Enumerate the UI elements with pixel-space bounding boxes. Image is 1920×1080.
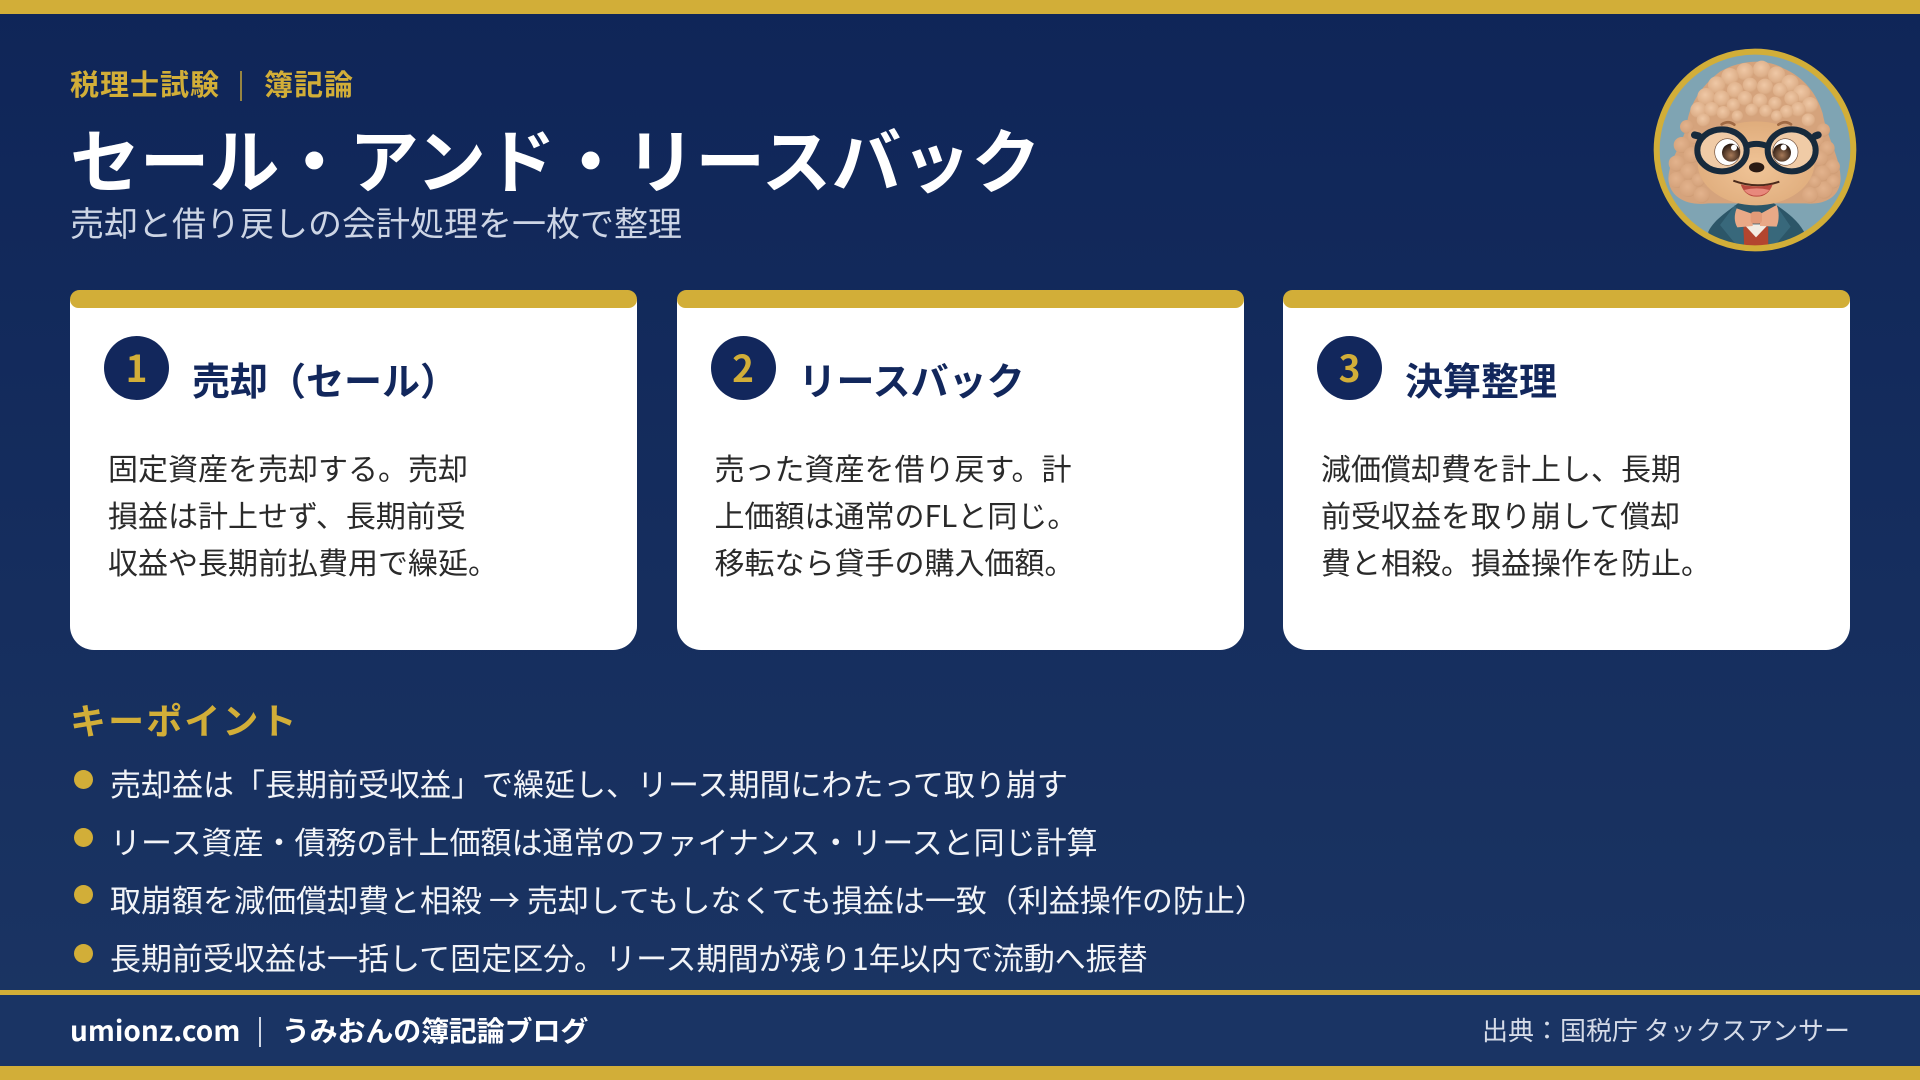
panel: key points list: [74, 760, 1266, 979]
glasses: [1695, 129, 1818, 171]
panel: key points list: 売却益は「長期前受収益」で繰延し、リース期間にわたって取り崩す: [110, 760, 1068, 805]
card body text: 収益や長期前払費用で繰延。: [108, 539, 498, 583]
footer site name: umionz.com うみおんの簿記論ブログ: [70, 1010, 588, 1050]
card body text: 減価償却費を計上し、長期: [1321, 445, 1681, 489]
card body text: 移転なら貸手の購入価額。: [714, 539, 1074, 583]
number badge 1: 1: [126, 339, 147, 393]
panel: card 1 sale: [70, 290, 637, 650]
title: セール・アンド・リースバック: [70, 107, 1041, 208]
bow tie: [1735, 205, 1779, 227]
card heading: 決算整理: [1405, 351, 1557, 406]
card body text: [108, 445, 498, 583]
jacket: [1708, 203, 1804, 244]
avatar background: [1656, 51, 1854, 249]
card body text: [1321, 445, 1711, 583]
face: [1698, 121, 1814, 205]
panel: footer: [0, 990, 1920, 1066]
hair base: [1668, 62, 1841, 204]
eyebrows: [1722, 122, 1791, 125]
number badge 2: 2: [732, 339, 754, 393]
card body text: 費と相殺。損益操作を防止。: [1321, 539, 1711, 583]
panel: card 2 leaseback: [676, 290, 1244, 650]
bullet 2: [74, 818, 1098, 863]
footer source: 出典：国税庁 タックスアンサー: [1482, 1011, 1850, 1048]
lower side curls: [1669, 120, 1840, 203]
card body text: 上価額は通常のFLと同じ。: [714, 492, 1077, 536]
panel: card 3 closing adjustments: [1283, 290, 1850, 650]
icon: mascot avatar: [1654, 48, 1856, 252]
number badge 3: [1317, 336, 1382, 400]
card accent bar: [70, 290, 637, 308]
eyebrow label: 税理士試験 簿記論: [70, 62, 354, 104]
number badge 3: 3: [1339, 339, 1360, 393]
key points heading: キーポイント: [70, 693, 299, 745]
number badge 2: [710, 336, 776, 400]
card accent bar: [676, 290, 1244, 308]
card body text: 前受収益を取り崩して償却: [1321, 492, 1680, 536]
panel: key points list: リース資産・債務の計上価額は通常のファイナンス・リースと同じ計算: [110, 818, 1098, 863]
bottom gold band: [0, 1066, 1920, 1080]
card body text: 損益は計上せず、長期前受: [108, 492, 466, 536]
bullet 1: [74, 760, 1068, 805]
nose: [1749, 162, 1764, 172]
eyes: [1715, 139, 1798, 165]
panel: key points list: 取崩額を減価償却費と相殺 → 売却してもしなくても損益は一致（利益操作の防止）: [110, 876, 1266, 921]
bullet 3: [74, 876, 1266, 921]
card body text: [714, 445, 1077, 583]
top gold band: [0, 0, 1920, 14]
card accent bar: [1283, 290, 1850, 308]
card heading: リースバック: [798, 351, 1025, 406]
number badge 1: [104, 336, 169, 400]
card heading: 売却（セール）: [192, 351, 458, 406]
lapels: [1720, 205, 1791, 245]
subtitle: 売却と借り戻しの会計処理を一枚で整理: [70, 197, 682, 246]
vest and shirt: [1743, 226, 1768, 246]
card body text: 売った資産を借り戻す。計: [714, 445, 1072, 489]
top curls: [1690, 61, 1818, 127]
avatar ring: [1657, 52, 1853, 248]
mouth: [1733, 181, 1779, 185]
bullet 4: [74, 934, 1148, 979]
panel: key points list: 長期前受収益は一括して固定区分。リース期間が残り1年以内で流動へ振替: [110, 934, 1148, 979]
card body text: 固定資産を売却する。売却: [108, 445, 468, 489]
